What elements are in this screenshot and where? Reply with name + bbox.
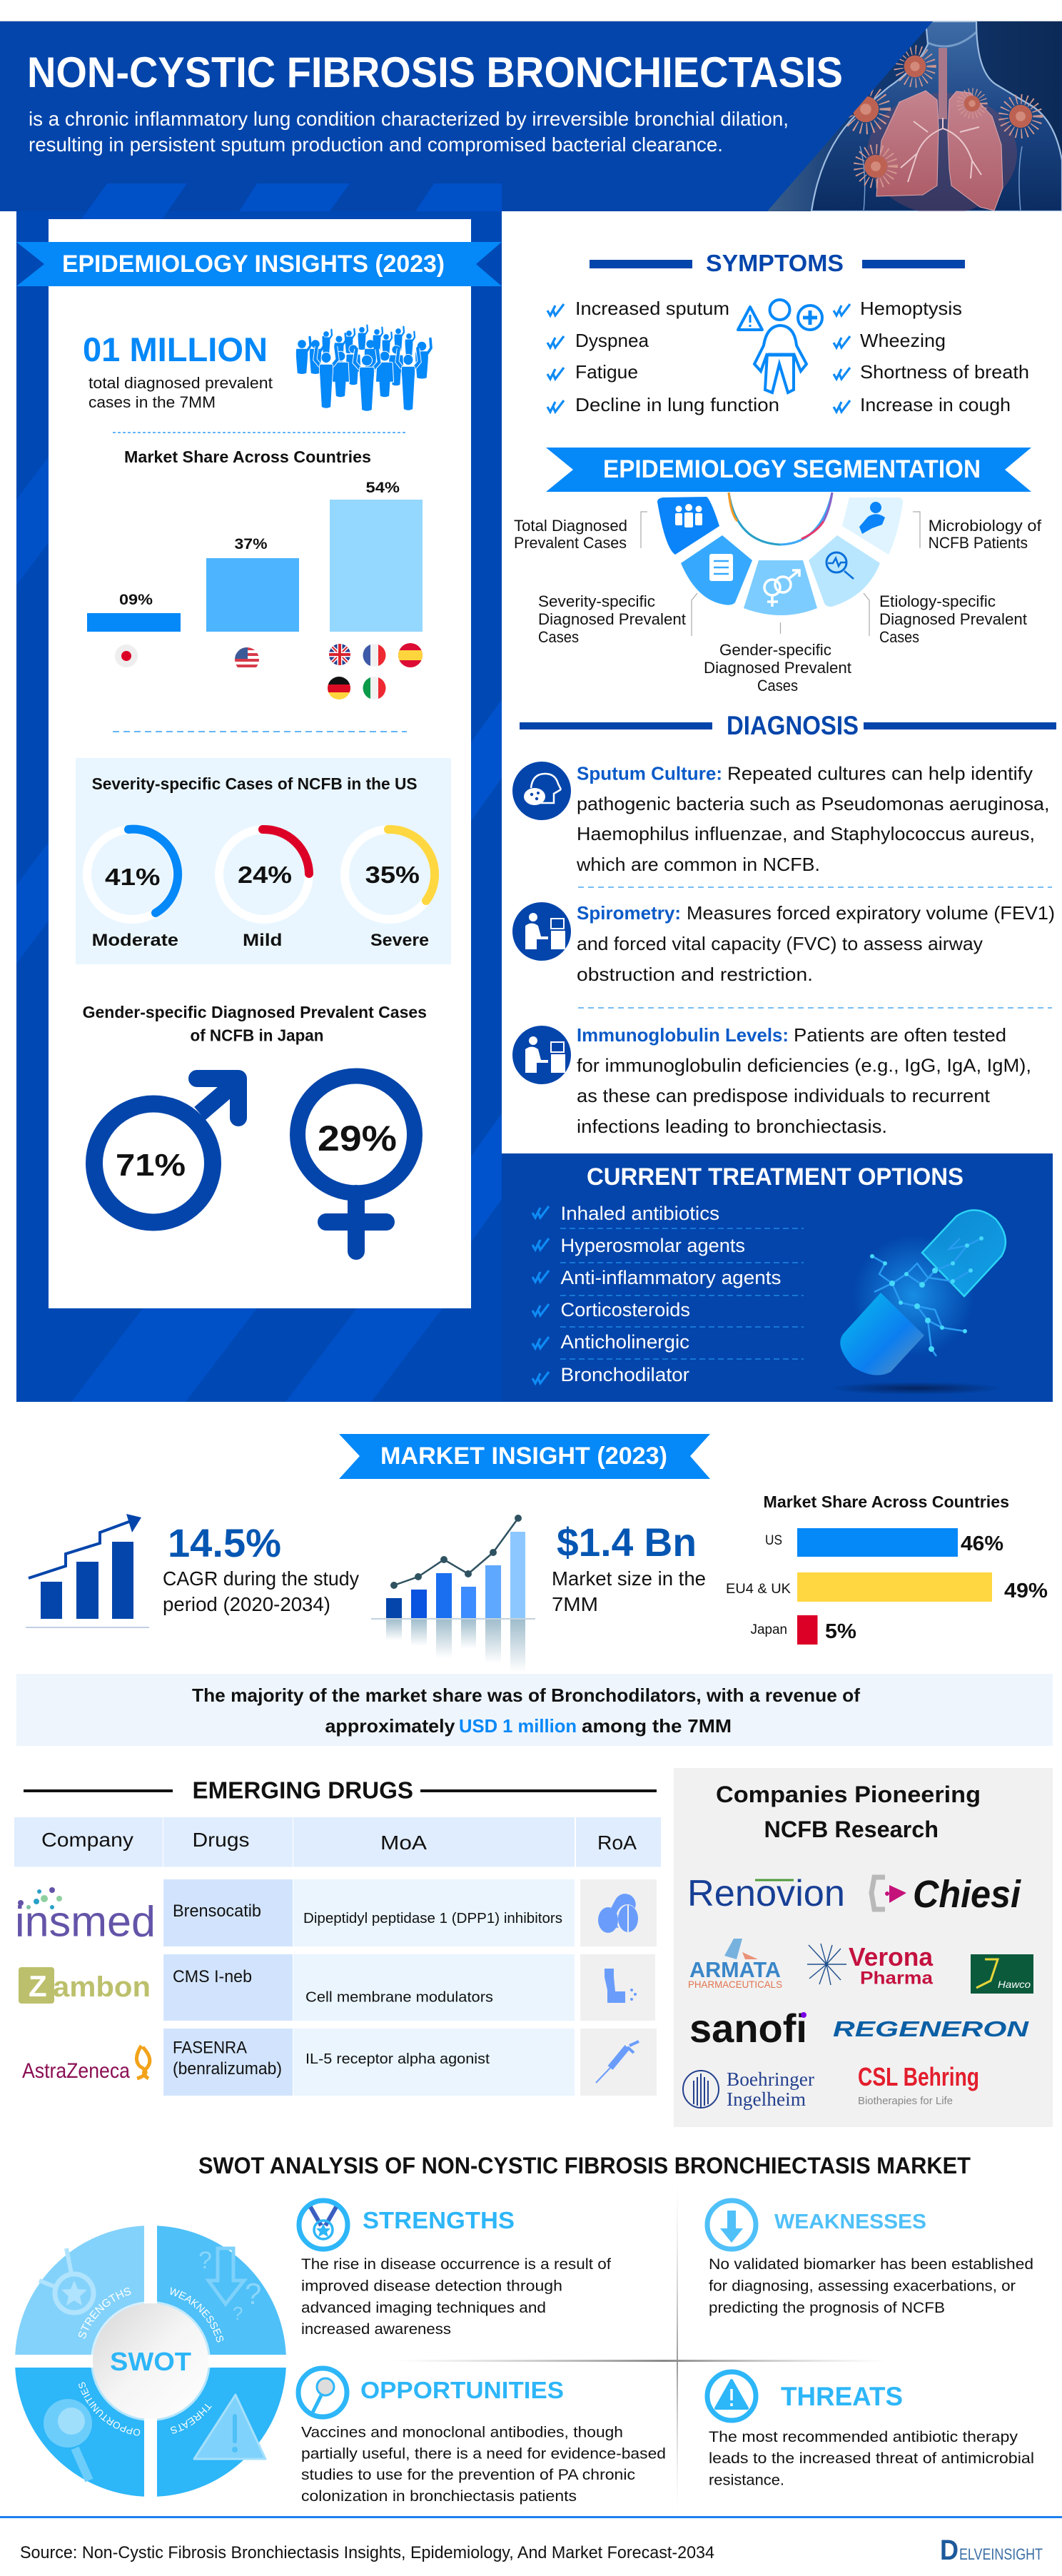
row: Insmed: Brensocatib xyxy=(173,1901,261,1921)
graphic: segmentation fan xyxy=(657,493,903,615)
stat: market size: Market size in the xyxy=(552,1567,706,1590)
logo: CSL Behring xyxy=(858,2062,979,2107)
swot: strengths: STRENGTHS xyxy=(363,2207,515,2233)
icon: magnifier xyxy=(298,2368,347,2417)
chart: market share across countries: Market Share Across Countries xyxy=(124,448,371,466)
diagnosis: spirometry: and forced vital capacity (FVC) to assess airway xyxy=(577,933,983,954)
stat: CAGR: period (2020-2034) xyxy=(163,1593,330,1615)
quadrant: opportunities xyxy=(15,2368,144,2497)
heading ribbon: EPIDEMIOLOGY INSIGHTS (2023) xyxy=(62,251,445,278)
flag: UK xyxy=(329,644,350,665)
swot: strengths: advanced imaging techniques and xyxy=(301,2300,546,2316)
diagnosis: immunoglobulin levels: Immunoglobulin Levels: xyxy=(577,1024,789,1046)
heading: emerging drugs xyxy=(24,1777,657,1803)
chart: market share bars: 49% xyxy=(1004,1580,1048,1602)
flag: France xyxy=(363,644,386,667)
chart: market share bars: 46% xyxy=(961,1532,1003,1555)
lung illustration xyxy=(764,21,1062,214)
chart: market share bars: Market Share Across Countries xyxy=(764,1492,1009,1511)
logo: Zambon: ambon xyxy=(53,1971,151,2003)
swot: strengths: increased awareness xyxy=(301,2321,451,2338)
labels: segmentation: Cases xyxy=(538,628,579,646)
logo: Hawco xyxy=(971,1954,1033,1994)
table header xyxy=(14,1817,661,1867)
labels: segmentation: Gender-specific xyxy=(719,641,831,659)
diagnosis: immunoglobulin levels: as these can predispose individuals to recurrent xyxy=(577,1085,991,1106)
swot: threats xyxy=(707,2372,1034,2488)
diagnosis: spirometry: Measures forced expiratory volume (FEV1) xyxy=(687,902,1055,924)
flag: Japan xyxy=(115,645,138,667)
heading: gender-specific cases: of NCFB in Japan xyxy=(190,1026,324,1045)
list: symptoms: Dyspnea xyxy=(575,330,649,351)
icon: syringe xyxy=(596,2041,639,2083)
row: AstraZeneca: FASENRA xyxy=(173,2039,247,2057)
callout: bronchodilators: The majority of the market share was of Bronchodilators, with a revenue of xyxy=(192,1684,860,1706)
banner xyxy=(0,21,1062,214)
panel: companies pioneering NCFB research xyxy=(674,1768,1053,2127)
footer xyxy=(0,2516,1062,2566)
table header: RoA xyxy=(597,1832,637,1854)
donut: mild 24%: Mild xyxy=(243,931,283,950)
segment: severity xyxy=(681,535,752,605)
quadrant: weaknesses xyxy=(157,2226,286,2355)
logo: DelveInsight xyxy=(940,2535,1043,2566)
logo: Armata: ARMATA xyxy=(689,1957,781,1982)
logo: Armata: PHARMACEUTICALS xyxy=(688,1979,782,1990)
flag: USA xyxy=(235,647,259,667)
swot: strengths: The rise in disease occurrence is a result of xyxy=(301,2256,611,2273)
list: symptoms: Decline in lung function xyxy=(575,394,779,415)
centre disc: SWOT xyxy=(110,2347,191,2376)
icon: pills xyxy=(598,1890,639,1933)
diagnosis: immunoglobulin levels: for immunoglobulin deficiencies (e.g., IgG, IgA, IgM), xyxy=(577,1055,1031,1076)
icon: patient with warning xyxy=(738,300,822,393)
table: emerging drugs xyxy=(14,1817,661,2096)
icon: female 29%: 29% xyxy=(318,1118,397,1158)
list: symptoms: Hemoptysis xyxy=(860,298,962,319)
diagnosis: immunoglobulin levels: Patients are often tested xyxy=(794,1024,1006,1046)
swot: weaknesses: for diagnosing, assessing exacerbations, or xyxy=(709,2278,1016,2294)
stat: CAGR: 14.5% xyxy=(168,1520,281,1565)
labels: segmentation: Diagnosed Prevalent xyxy=(879,610,1027,628)
ribbon: epidemiology segmentation: EPIDEMIOLOGY SEGMENTATION xyxy=(603,455,981,483)
chart icon: market size xyxy=(371,1515,535,1672)
logo: Renovion: Renovion xyxy=(687,1873,845,1914)
labels: segmentation: Cases xyxy=(879,628,919,646)
list: symptoms: Increase in cough xyxy=(860,394,1011,415)
heading: diagnosis: DIAGNOSIS xyxy=(727,711,859,740)
table header: Drugs xyxy=(193,1829,250,1851)
heading: symptoms: SYMPTOMS xyxy=(706,250,844,276)
list: treatments: Inhaled antibiotics xyxy=(561,1203,719,1224)
donut: mild 24%: 24% xyxy=(238,862,292,888)
icon: sputum xyxy=(512,762,571,820)
swot: threats: resistance. xyxy=(709,2473,784,2488)
table header: Company xyxy=(41,1829,133,1851)
diagnosis: sputum culture: Sputum Culture: xyxy=(577,762,722,784)
chart: market share bars: Japan xyxy=(751,1622,787,1637)
stat: 01 million: 01 MILLION xyxy=(83,330,268,368)
flag: Spain xyxy=(398,642,423,668)
logo: CSL Behring: CSL Behring xyxy=(858,2062,979,2091)
icon: medal xyxy=(299,2201,348,2249)
subtitle xyxy=(29,108,789,156)
chart: market share bars: 5% xyxy=(825,1620,856,1643)
diagnosis: immunoglobulin levels xyxy=(512,1024,1031,1137)
stat: CAGR xyxy=(163,1520,359,1615)
diagnosis: sputum culture: Haemophilus influenzae, and Staphylococcus aureus, xyxy=(577,823,1035,844)
swot: threats: THREATS xyxy=(781,2382,903,2411)
row: AstraZeneca: (benralizumab) xyxy=(173,2059,282,2079)
logo: Zambon xyxy=(19,1967,151,2004)
heading: emerging drugs: EMERGING DRUGS xyxy=(193,1777,413,1803)
logo: Boehringer Ingelheim: Boehringer xyxy=(727,2069,814,2090)
quadrant: weaknesses: WEAKNESSES xyxy=(170,2287,224,2343)
stat: market size xyxy=(552,1520,706,1615)
stat: 01 million xyxy=(83,330,273,411)
chart: market share bars xyxy=(726,1492,1048,1645)
list: treatments: Corticosteroids xyxy=(561,1299,690,1320)
logo: Verona Pharma: Pharma xyxy=(860,1969,934,1989)
logo: DelveInsight: D xyxy=(940,2535,959,2566)
diagnosis: spirometry xyxy=(512,902,1055,985)
list: symptoms: Increased sputum xyxy=(575,298,729,319)
icon: down arrow xyxy=(707,2201,756,2249)
quadrant: strengths xyxy=(15,2226,144,2355)
swot: opportunities: OPPORTUNITIES xyxy=(360,2377,564,2403)
callout: bronchodilators: among the 7MM xyxy=(582,1715,732,1737)
labels: segmentation: Severity-specific xyxy=(538,592,655,610)
swot: weaknesses: WEAKNESSES xyxy=(774,2211,926,2233)
footer: Source: Non-Cystic Fibrosis Bronchiectasis Insights, Epidemiology, And Market Forecast-2034 xyxy=(20,2543,714,2562)
ribbon: market insight xyxy=(339,1434,710,1479)
graphic: SWOT wheel xyxy=(15,2226,286,2497)
chart: market share bars: EU4 & UK xyxy=(726,1582,791,1597)
icon: male 71%: 71% xyxy=(116,1148,186,1183)
swot: threats: leads to the increased threat of antimicrobial xyxy=(709,2450,1034,2467)
diagnosis: sputum culture: pathogenic bacteria such as Pseudomonas aeruginosa, xyxy=(577,793,1049,814)
labels: segmentation: Diagnosed Prevalent xyxy=(538,610,686,628)
heading: SWOT analysis: SWOT ANALYSIS OF NON-CYSTIC FIBROSIS BRONCHIECTASIS MARKET xyxy=(198,2153,971,2178)
swot: weaknesses xyxy=(707,2201,1033,2316)
panel: severity-specific cases: Severity-specific Cases of NCFB in the US xyxy=(92,774,418,793)
row: Insmed: Dipeptidyl peptidase 1 (DPP1) inhibitors xyxy=(303,1911,562,1926)
panel: companies pioneering NCFB research: Companies Pioneering xyxy=(716,1782,981,1807)
flag: Germany xyxy=(328,677,350,700)
logo: AstraZeneca: AstraZeneca xyxy=(22,2059,130,2083)
donut: mild 24% xyxy=(219,829,309,950)
stat: market size: 7MM xyxy=(552,1593,598,1615)
labels: segmentation: Cases xyxy=(757,677,798,694)
logo: Insmed: insmed xyxy=(15,1898,156,1946)
diagnosis: sputum culture xyxy=(512,762,1049,875)
donut: severe 35% xyxy=(345,829,435,950)
title: NON-CYSTIC FIBROSIS BRONCHIECTASIS xyxy=(27,49,843,96)
donut: severe 35%: 35% xyxy=(365,862,420,888)
swot: opportunities: colonization in bronchiectasis patients xyxy=(301,2488,577,2505)
labels: segmentation: Total Diagnosed xyxy=(514,517,627,535)
quadrant: weaknesses: ? xyxy=(198,2247,212,2274)
ribbon: epidemiology segmentation xyxy=(546,448,1031,492)
swot: strengths: improved disease detection through xyxy=(301,2278,562,2294)
logo: Chiesi xyxy=(871,1873,1021,1916)
icon: inhaler xyxy=(605,1969,637,2003)
quadrant: threats xyxy=(157,2368,286,2497)
list: treatments: Hyperosmolar agents xyxy=(561,1235,745,1256)
panel: current treatment options: CURRENT TREATMENT OPTIONS xyxy=(587,1163,964,1191)
logo: CSL Behring: Biotherapies for Life xyxy=(858,2095,953,2107)
list: symptoms: Wheezing xyxy=(860,330,946,351)
list: symptoms xyxy=(547,298,1029,415)
donut: moderate 41%: 41% xyxy=(105,864,160,890)
swot: opportunities xyxy=(298,2368,666,2505)
panel: current treatment options xyxy=(502,1153,1053,1402)
logo: Verona Pharma xyxy=(807,1942,934,1989)
logo: Sanofi: sanofi xyxy=(689,2006,807,2051)
swot: strengths xyxy=(299,2201,611,2338)
panel: severity-specific cases xyxy=(76,758,451,964)
icon: female 29% xyxy=(298,1076,415,1251)
icon: crowd xyxy=(296,325,431,411)
swot: threats: The most recommended antibiotic therapy xyxy=(709,2429,1018,2445)
chart: market share across countries: 54% xyxy=(365,480,400,496)
diagnosis: immunoglobulin levels: infections leading to bronchiectasis. xyxy=(577,1116,887,1137)
quadrant: weaknesses: ? xyxy=(233,2303,243,2324)
list: symptoms: Fatigue xyxy=(575,361,638,383)
ribbon: market insight: MARKET INSIGHT (2023) xyxy=(380,1443,667,1470)
subtitle: resulting in persistent sputum production and compromised bacterial clearance. xyxy=(29,133,723,156)
heading: diagnosis xyxy=(520,711,1056,740)
swot: opportunities: partially useful, there is a need for evidence-based xyxy=(301,2446,666,2463)
labels: segmentation: Etiology-specific xyxy=(879,592,996,610)
donut: moderate 41%: Moderate xyxy=(92,931,178,950)
swot: weaknesses: No validated biomarker has been established xyxy=(709,2256,1033,2273)
logo: Boehringer Ingelheim: Ingelheim xyxy=(727,2088,806,2110)
heading ribbon xyxy=(16,242,502,286)
logo: Regeneron: REGENERON xyxy=(833,2016,1029,2041)
logo: Verona Pharma: Verona xyxy=(849,1942,934,1971)
logo: Hawco: Hawco xyxy=(998,1979,1031,1990)
labels: segmentation xyxy=(514,512,1042,694)
row: Zambon: CMS I-neb xyxy=(173,1967,252,1986)
segment: etiology xyxy=(809,535,880,607)
quadrant: threats: THREATS xyxy=(171,2404,212,2434)
row: AstraZeneca xyxy=(22,2029,657,2096)
segment: gender xyxy=(744,560,817,615)
logo: Armata xyxy=(688,1939,782,1990)
stat: CAGR: CAGR during the study xyxy=(163,1567,359,1590)
diagnosis: sputum culture: Repeated cultures can help identify xyxy=(727,762,1033,784)
diagnosis: sputum culture: which are common in NCFB. xyxy=(576,854,820,875)
row: AstraZeneca: IL-5 receptor alpha agonist xyxy=(305,2051,490,2067)
donut: severe 35%: Severe xyxy=(370,931,429,950)
row: Zambon xyxy=(19,1954,655,2021)
chart: market share across countries xyxy=(87,448,423,700)
chart icon: CAGR bars with arrow xyxy=(26,1514,149,1627)
panel: companies pioneering NCFB research: NCFB Research xyxy=(764,1817,939,1842)
swot: opportunities: Vaccines and monoclonal antibodies, though xyxy=(301,2424,623,2441)
flag: Italy xyxy=(363,677,386,699)
heading: symptoms xyxy=(590,250,965,276)
diagnosis: spirometry: Spirometry: xyxy=(577,902,681,924)
icon: capsule xyxy=(829,1210,1006,1395)
row: Zambon: Cell membrane modulators xyxy=(305,1990,493,2006)
callout: bronchodilators: USD 1 million xyxy=(459,1715,577,1737)
segment: total diagnosed xyxy=(657,497,719,555)
list: symptoms: Shortness of breath xyxy=(860,361,1029,383)
donut: moderate 41% xyxy=(87,829,178,950)
labels: segmentation: NCFB Patients xyxy=(929,534,1028,552)
heading: gender-specific cases xyxy=(83,1003,427,1045)
logo: Chiesi: Chiesi xyxy=(913,1873,1021,1916)
list: treatments: Anticholinergic xyxy=(561,1331,689,1353)
diagnosis: spirometry: obstruction and restriction. xyxy=(577,964,813,985)
swot: weaknesses: predicting the prognosis of NCFB xyxy=(709,2300,945,2316)
stat: 01 million: cases in the 7MM xyxy=(88,393,216,411)
heading: gender-specific cases: Gender-specific Diagnosed Prevalent Cases xyxy=(83,1003,427,1021)
icon: warning xyxy=(707,2372,756,2420)
logo: AstraZeneca xyxy=(22,2046,150,2083)
table header: MoA xyxy=(380,1832,427,1854)
swot: opportunities: studies to use for the prevention of PA chronic xyxy=(301,2467,635,2483)
icon: immunoglobulin xyxy=(512,1026,571,1084)
stat: market size: $1.4 Bn xyxy=(557,1520,697,1565)
panel: epidemiology insights xyxy=(16,183,502,1402)
icon: spirometry xyxy=(512,902,571,961)
icon: male 71% xyxy=(94,1079,240,1222)
chart: market share across countries: 37% xyxy=(234,536,268,552)
logo: Zambon: Z xyxy=(29,1969,47,2003)
chart: market share bars: US xyxy=(765,1533,782,1548)
list: treatments xyxy=(532,1203,804,1385)
quadrant: weaknesses: ? xyxy=(245,2277,261,2310)
logo: Boehringer Ingelheim xyxy=(683,2069,814,2110)
centre disc xyxy=(91,2301,211,2421)
list: treatments: Anti-inflammatory agents xyxy=(561,1267,781,1288)
row: Insmed xyxy=(15,1879,657,1946)
callout: bronchodilators xyxy=(16,1674,1053,1746)
labels: segmentation: Prevalent Cases xyxy=(514,534,627,552)
quadrant: strengths: STRENGTHS xyxy=(79,2288,131,2338)
logo: DelveInsight: ELVEINSIGHT xyxy=(959,2545,1043,2563)
stat: 01 million: total diagnosed prevalent xyxy=(88,374,273,392)
labels: segmentation: Diagnosed Prevalent xyxy=(704,659,851,677)
labels: segmentation: Microbiology of xyxy=(929,517,1042,535)
chart: market share across countries: 09% xyxy=(119,592,153,608)
subtitle: is a chronic inflammatory lung condition characterized by irreversible bronchial dilation, xyxy=(29,108,789,130)
callout: bronchodilators: approximately xyxy=(325,1715,455,1737)
segment: microbiology xyxy=(842,497,903,555)
list: treatments: Bronchodilator xyxy=(561,1364,689,1385)
quadrant: opportunities: OPPORTUNITIES xyxy=(79,2382,140,2435)
